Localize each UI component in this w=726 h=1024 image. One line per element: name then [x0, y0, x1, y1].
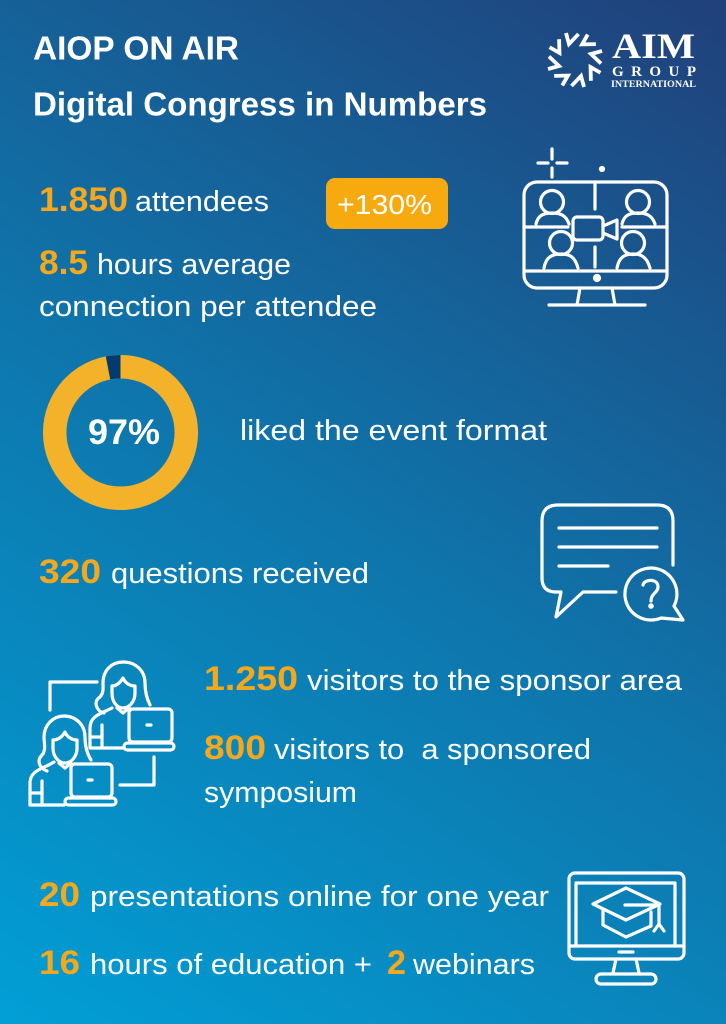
logo wordmark: GROUP	[612, 64, 696, 80]
title: AIOP ON AIR	[33, 30, 239, 66]
icon: chat bubble with question	[542, 505, 683, 620]
badge: +130%: +130%	[337, 189, 432, 220]
stat: hours of education and webinars: hours of education +	[90, 949, 372, 981]
stat: hours of education and webinars: 2	[387, 944, 406, 982]
text: liked the event format: liked the event format	[240, 415, 547, 447]
stat: presentations online: presentations online for one year	[90, 881, 549, 913]
stat: hours average connection: 8.5	[39, 244, 88, 282]
stat: attendees: 1.850	[39, 181, 128, 219]
stat: hours average connection: connection per attendee	[39, 291, 377, 323]
dark segment: remaining 3%	[108, 367, 120, 368]
stat: attendees	[39, 181, 269, 219]
title: Digital Congress in Numbers	[33, 86, 487, 122]
stat: hours average connection: hours average	[97, 249, 291, 281]
stat: presentations online: 20	[39, 876, 80, 914]
stat: hours of education and webinars: webinars	[412, 949, 535, 981]
logo wordmark	[611, 26, 696, 89]
logo wordmark: AIM	[612, 26, 695, 66]
stat: presentations online	[39, 876, 549, 914]
stat: questions received: questions received	[111, 558, 369, 590]
stat: hours average connection	[39, 244, 377, 323]
donut chart: 97%	[55, 367, 186, 498]
stat: visitors to the sponsor area: visitors to the sponsor area	[307, 665, 683, 697]
icon: women with laptops	[30, 662, 174, 805]
title	[33, 30, 487, 122]
badge: +130%	[326, 178, 448, 229]
stat: questions received: 320	[39, 553, 101, 591]
icon: video conference monitor	[524, 149, 667, 305]
stat: visitors to the sponsor area	[204, 660, 683, 698]
logo pinwheel mark	[548, 33, 602, 87]
donut chart: 97%: 97%	[88, 413, 160, 452]
logo: AIM Group International	[548, 26, 696, 89]
stat: visitors to a sponsored symposium: visitors to a sponsored	[274, 734, 591, 766]
stat: visitors to the sponsor area: 1.250	[204, 660, 298, 698]
stat: hours of education and webinars	[39, 944, 535, 982]
stat: hours of education and webinars: 16	[39, 944, 80, 982]
stat: visitors to a sponsored symposium: symposium	[204, 777, 357, 809]
back figure	[90, 662, 174, 750]
stat: visitors to a sponsored symposium	[204, 729, 591, 809]
front figure	[30, 716, 116, 805]
icon: graduation cap on monitor	[569, 873, 684, 984]
logo wordmark: INTERNATIONAL	[611, 79, 696, 89]
stat: visitors to a sponsored symposium: 800	[204, 729, 266, 767]
stat: questions received	[39, 553, 369, 591]
stat: attendees: attendees	[135, 186, 269, 218]
